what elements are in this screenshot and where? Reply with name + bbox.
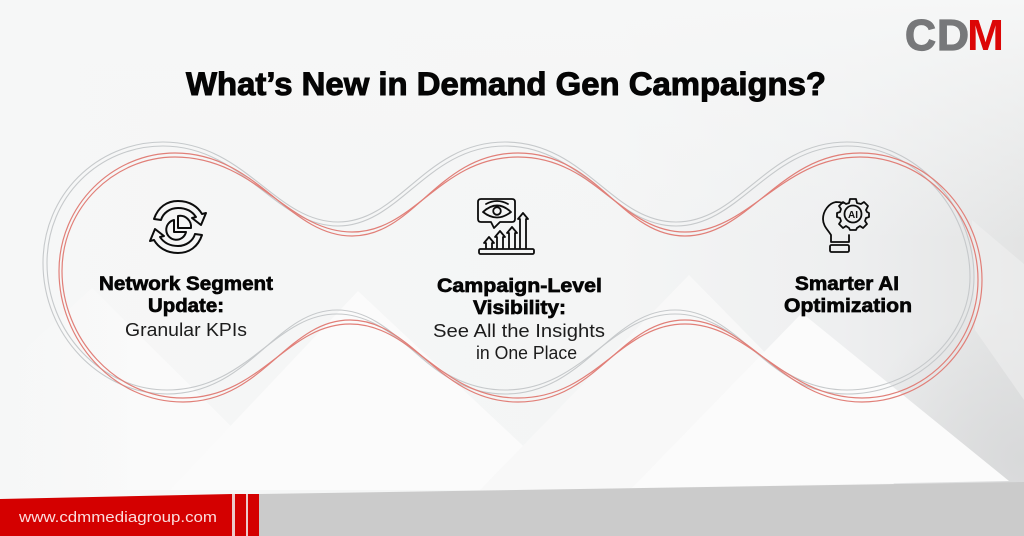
text block: campaign-level visibility: in One Place [476,343,577,363]
icon: circular arrows with pie chart [150,201,206,253]
icon: light bulb with AI gear [823,199,869,252]
flowing outline: red inner [62,157,978,398]
text block: network segment update: Network Segment [99,274,274,295]
text block: campaign-level visibility: Campaign-Level [437,276,602,297]
text block: network segment update: Granular KPIs [125,320,247,340]
flowing outline: red outer [59,153,982,402]
logo: M [967,11,1004,60]
text block: campaign-level visibility: Visibility: [473,298,566,319]
icon: light bulb with AI gear: AI [848,210,858,221]
logo: D [937,11,969,60]
text block: smarter AI optimization: Smarter AI [795,274,899,295]
footer: red bar with stripes [0,494,259,536]
text block: campaign-level visibility: See All the Insights [433,321,605,341]
logo [905,11,1004,60]
text block: smarter AI optimization [784,274,912,317]
text block: smarter AI optimization: Optimization [784,296,912,317]
icon: eye in speech bubble with rising arrows [478,199,534,254]
footer: gray band [259,482,1024,536]
flowing outline: gray outer [43,142,974,394]
text block: network segment update: Update: [148,296,224,317]
footer: website url: www.cdmmediagroup.com [18,509,217,526]
text block: network segment update [99,274,274,340]
text block: campaign-level visibility [433,276,605,363]
logo: C [905,11,936,60]
flowing outline: gray inner [47,146,970,390]
title: What’s New in Demand Gen Campaigns? [186,66,826,102]
